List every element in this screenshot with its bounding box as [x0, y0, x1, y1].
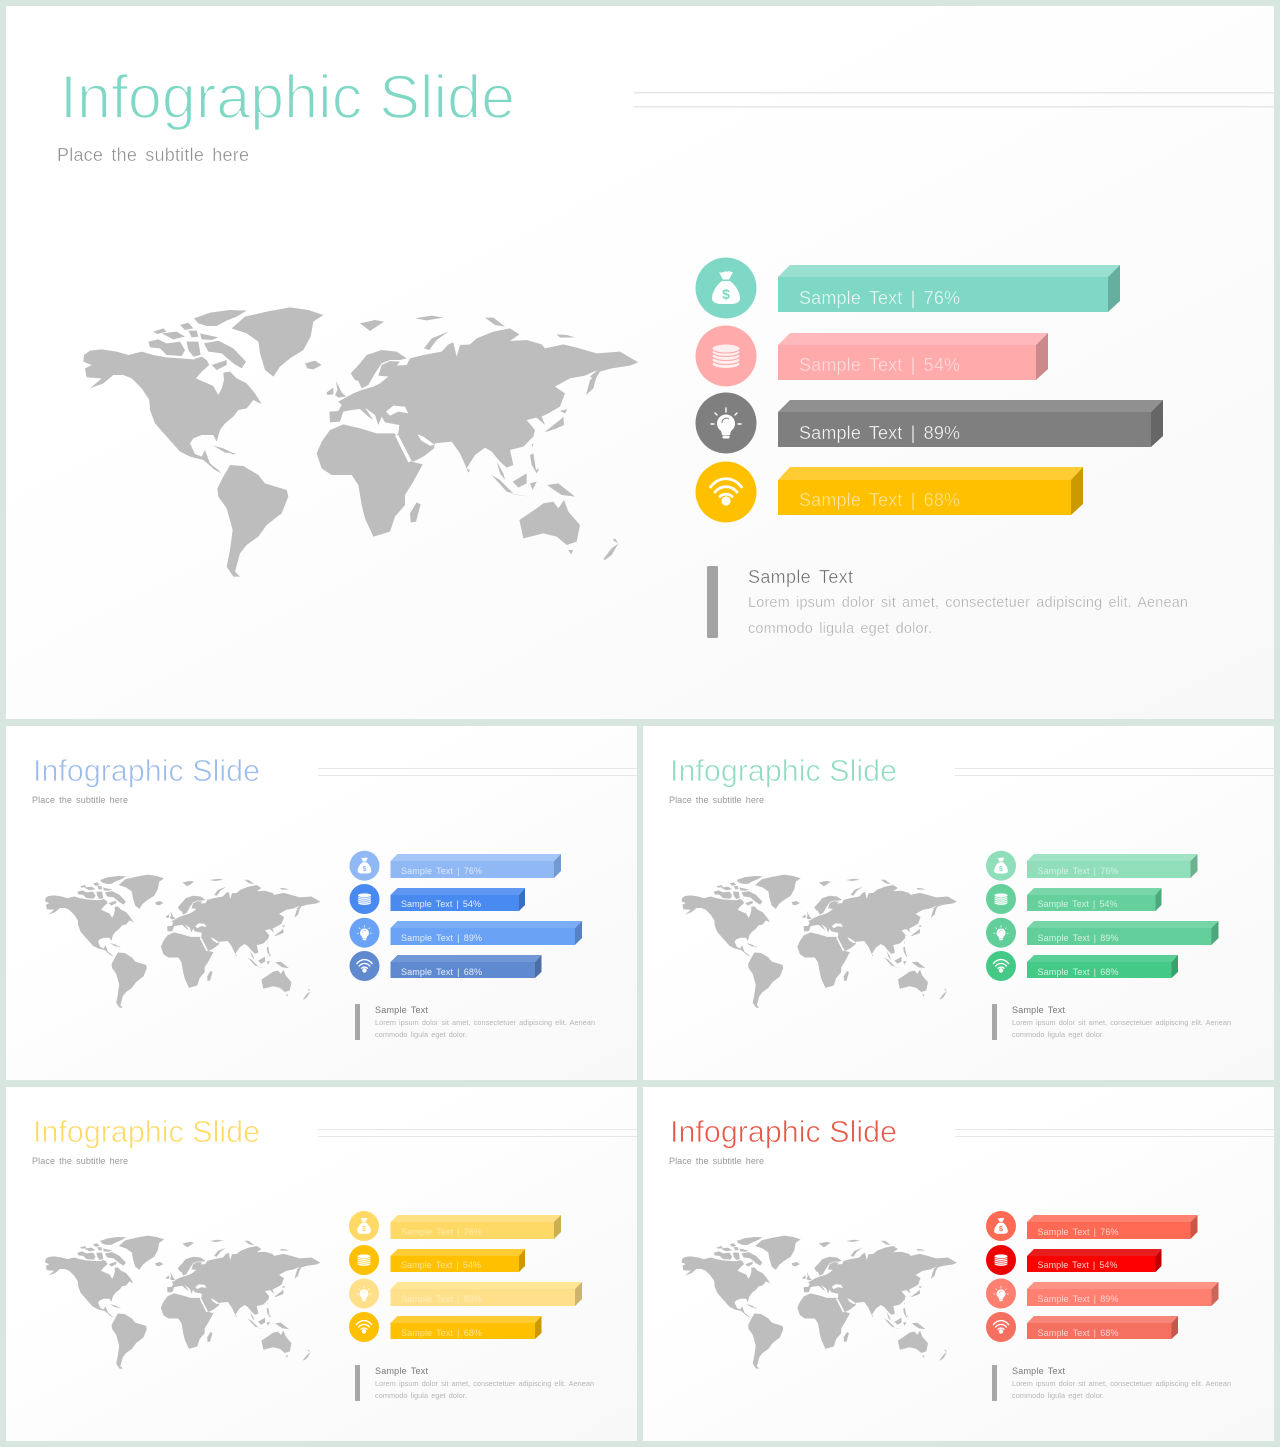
icon: money bag	[350, 851, 380, 881]
icon: coin stack	[986, 1245, 1016, 1275]
text block accent bar	[355, 1365, 360, 1401]
bar: 76%: Sample Text | 76%	[1038, 1227, 1118, 1237]
bar: 89%	[1027, 1282, 1218, 1306]
bar: 89%: Sample Text | 89%	[401, 1294, 482, 1304]
panel: blue slide	[6, 726, 637, 1080]
bar: 89%	[778, 400, 1163, 447]
icon: money bag	[349, 1211, 379, 1241]
bar: 76%	[1027, 1215, 1198, 1239]
bar: 54%: Sample Text | 54%	[401, 1260, 481, 1270]
text block accent bar	[355, 1004, 360, 1040]
text block: Sample Text	[1012, 1366, 1065, 1376]
icon: money bag	[986, 1211, 1016, 1241]
icon: light bulb	[696, 392, 756, 454]
text block: Sample Text	[748, 567, 853, 587]
bar: 76%: Sample Text | 76%	[401, 1227, 482, 1237]
world map	[45, 875, 320, 1008]
icon: money bag: $	[722, 286, 730, 302]
subtitle: Place the subtitle here	[669, 795, 764, 805]
icon: money bag: $	[999, 866, 1003, 873]
bar: 68%: Sample Text | 68%	[401, 1328, 482, 1338]
title: Infographic Slide	[33, 754, 260, 788]
text block	[1012, 1366, 1231, 1400]
bar: 68%: Sample Text | 68%	[799, 490, 960, 510]
icon: wifi	[986, 951, 1016, 981]
world map	[682, 875, 957, 1008]
subtitle: Place the subtitle here	[32, 795, 128, 805]
header rule lines	[318, 768, 637, 776]
panel: red slide	[643, 1087, 1274, 1441]
bar: 89%: Sample Text | 89%	[1038, 933, 1118, 943]
bar: 76%	[390, 1215, 561, 1239]
bar: 89%: Sample Text | 89%	[401, 933, 482, 943]
text block accent bar	[992, 1004, 997, 1040]
bar: 54%	[390, 1249, 525, 1272]
title: Infographic Slide	[670, 754, 897, 788]
bar: 54%	[1027, 1249, 1162, 1272]
text block	[1012, 1005, 1231, 1039]
icon: wifi	[986, 1312, 1016, 1342]
header rule lines	[955, 1129, 1274, 1137]
icon: money bag	[986, 851, 1016, 881]
icon: light bulb	[349, 1278, 379, 1308]
icon: light bulb	[986, 1278, 1016, 1308]
text block: commodo ligula eget dolor.	[375, 1030, 467, 1039]
text block: Lorem ipsum dolor sit amet, consectetuer adipiscing elit. Aenean	[375, 1379, 594, 1388]
text block: Sample Text	[1012, 1005, 1065, 1015]
text block: Lorem ipsum dolor sit amet, consectetuer adipiscing elit. Aenean	[1012, 1018, 1231, 1027]
icon: coin stack	[986, 884, 1016, 914]
title: Infographic Slide	[670, 1115, 897, 1149]
subtitle: Place the subtitle here	[57, 145, 249, 165]
text block accent bar	[992, 1365, 997, 1401]
bar: 89%	[1027, 921, 1218, 945]
world map	[682, 1236, 957, 1369]
text block	[748, 567, 1188, 637]
icon: wifi	[349, 1312, 379, 1342]
bar: 68%	[1027, 955, 1178, 978]
text block: Sample Text	[375, 1366, 428, 1376]
text block: commodo ligula eget dolor.	[1012, 1391, 1104, 1400]
panel: green slide	[643, 726, 1274, 1080]
bar: 76%	[778, 265, 1120, 312]
bar: 89%	[390, 1282, 582, 1306]
panel: yellow slide	[6, 1087, 637, 1441]
world map	[45, 1236, 320, 1369]
icon: wifi	[696, 462, 756, 522]
subtitle: Place the subtitle here	[32, 1156, 128, 1166]
bar: 68%	[390, 1316, 542, 1339]
text block: Lorem ipsum dolor sit amet, consectetuer adipiscing elit. Aenean	[748, 595, 1188, 611]
world map	[83, 307, 638, 577]
bar: 89%	[390, 921, 582, 945]
text block accent bar	[707, 566, 718, 638]
bar: 54%	[1027, 888, 1162, 911]
bar: 54%	[390, 888, 525, 911]
text block: commodo ligula eget dolor.	[375, 1391, 467, 1400]
bar: 68%	[390, 955, 542, 978]
bar: 54%: Sample Text | 54%	[1038, 1260, 1118, 1270]
title: Infographic Slide	[60, 63, 515, 131]
icon: coin stack	[696, 326, 756, 386]
icon: money bag: $	[362, 1226, 366, 1233]
bar: 68%: Sample Text | 68%	[1038, 1328, 1118, 1338]
bar: 76%	[1027, 854, 1198, 878]
text block: Lorem ipsum dolor sit amet, consectetuer adipiscing elit. Aenean	[1012, 1379, 1231, 1388]
text block: Sample Text	[375, 1005, 428, 1015]
text block: Lorem ipsum dolor sit amet, consectetuer adipiscing elit. Aenean	[375, 1018, 595, 1027]
text block: commodo ligula eget dolor.	[1012, 1030, 1104, 1039]
panel: main teal slide	[6, 6, 1274, 719]
bar: 54%	[778, 333, 1048, 380]
icon: wifi	[350, 951, 380, 981]
bar: 68%: Sample Text | 68%	[1038, 967, 1118, 977]
icon: money bag	[696, 258, 756, 318]
bar: 54%: Sample Text | 54%	[1038, 899, 1118, 909]
bar: 68%: Sample Text | 68%	[401, 967, 482, 977]
icon: coin stack	[350, 884, 380, 914]
icon: coin stack	[349, 1245, 379, 1275]
header rule lines	[955, 768, 1274, 776]
bar: 89%: Sample Text | 89%	[799, 423, 960, 443]
icon: light bulb	[986, 918, 1016, 948]
text block: commodo ligula eget dolor.	[748, 621, 932, 637]
bar: 76%: Sample Text | 76%	[1038, 866, 1118, 876]
bar: 89%: Sample Text | 89%	[1038, 1294, 1118, 1304]
icon: money bag: $	[363, 866, 367, 873]
text block	[375, 1005, 595, 1039]
text block	[375, 1366, 594, 1400]
bar: 76%	[390, 854, 561, 878]
header rule lines	[318, 1129, 637, 1137]
subtitle: Place the subtitle here	[669, 1156, 764, 1166]
bar: 54%: Sample Text | 54%	[799, 355, 960, 375]
icon: money bag: $	[999, 1226, 1003, 1233]
header rule lines	[634, 92, 1274, 108]
title: Infographic Slide	[33, 1115, 260, 1149]
bar: 76%: Sample Text | 76%	[401, 866, 482, 876]
bar: 54%: Sample Text | 54%	[401, 899, 481, 909]
bar: 68%	[1027, 1316, 1178, 1339]
icon: light bulb	[350, 918, 380, 948]
bar: 68%	[778, 467, 1083, 515]
bar: 76%: Sample Text | 76%	[799, 288, 960, 308]
